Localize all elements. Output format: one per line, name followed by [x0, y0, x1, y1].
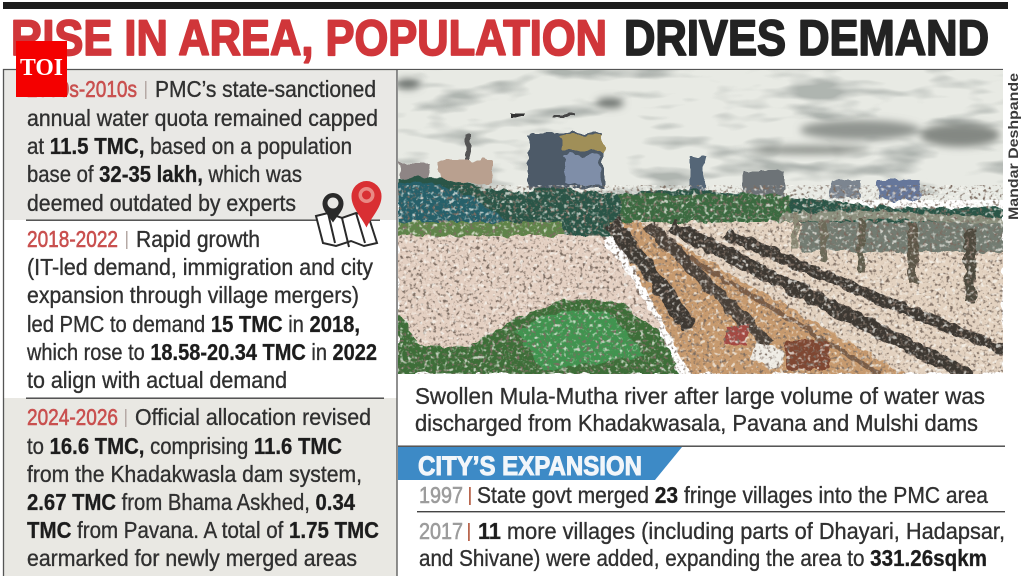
text block: 2000s-2010s	[27, 76, 378, 216]
text block: 2018-2022: (IT-led demand, immigration and city	[27, 254, 373, 280]
text block: 2018-2022: 2018-2022	[27, 226, 118, 252]
text block: 2000s-2010s: annual water quota remained capped	[27, 105, 378, 131]
text block: 2018-2022: Rapid growth	[136, 226, 260, 252]
speckle texture	[398, 185, 1003, 374]
photo credit: Mandar Deshpande	[1006, 72, 1021, 220]
entry: 2017: and Shivane) were added, expanding the area to 331.26sqkm	[419, 545, 987, 571]
section background: 2018-2022	[4, 220, 397, 398]
river right	[640, 222, 1003, 374]
text block: 2024-2026: Official allocation revised	[135, 404, 371, 430]
entry: 1997: State govt merged 23 fringe villages into the PMC area	[477, 482, 988, 508]
text block: 2018-2022	[26, 226, 377, 393]
landscape	[398, 113, 1008, 376]
text block: 2024-2026: from the Khadakwasla dam system,	[27, 461, 362, 487]
entry: 2017	[419, 518, 1005, 571]
TOI badge: TOI	[20, 55, 63, 81]
photo: swollen Mula-Mutha river	[396, 70, 1008, 376]
banner: CITY’S EXPANSION	[418, 451, 642, 481]
entry: 2017: 2017	[419, 518, 463, 544]
text block: 2024-2026: earmarked for newly merged areas	[27, 545, 357, 571]
entry: 1997: 1997	[419, 482, 463, 508]
text block: 2018-2022: which rose to 18.58-20.34 TMC in 2022	[26, 339, 377, 365]
foreground bushes	[398, 299, 680, 374]
entry: 2017: 11 more villages (including parts of Dhayari, Hadapsar,	[478, 518, 1005, 544]
section background: 2024-2026	[4, 398, 397, 576]
text block: 2024-2026	[27, 404, 379, 571]
text block: 2018-2022: led PMC to demand 15 TMC in 2018,	[27, 311, 360, 337]
title: RISE IN AREA, POPULATION	[11, 10, 607, 66]
text block: 2024-2026: TMC from Pavana. A total of 1.75 TMC	[27, 517, 379, 543]
caption: Swollen Mula-Mutha river after large volume of water was	[415, 383, 985, 409]
road and bridge	[610, 222, 905, 374]
text block: 2000s-2010s: base of 32-35 lakh, which was	[27, 161, 302, 187]
text block: 2018-2022: expansion through village mergers)	[27, 282, 359, 308]
cloud texture	[398, 70, 1003, 195]
vehicles	[749, 341, 785, 371]
caption	[415, 383, 985, 436]
text block: 2000s-2010s: deemed outdated by experts	[27, 190, 296, 216]
text block: 2000s-2010s: PMC’s state-sanctioned	[155, 76, 376, 102]
text block: 2000s-2010s: 2000s-2010s	[27, 76, 137, 102]
icon: map with pins	[316, 181, 382, 247]
top black bar	[3, 2, 1008, 9]
skyline buildings	[528, 133, 603, 188]
text block: 2000s-2010s: at 11.5 TMC, based on a population	[27, 133, 352, 159]
text block: 2024-2026: to 16.6 TMC, comprising 11.6 TMC	[27, 433, 342, 459]
flyover	[800, 222, 1003, 252]
caption: discharged from Khadakwasala, Pavana and Mulshi dams	[415, 410, 978, 436]
text block: 2018-2022: to align with actual demand	[27, 367, 287, 393]
section background: 2000s-2010s	[4, 70, 397, 220]
tree line	[398, 177, 1003, 238]
panel: city's expansion	[398, 446, 1005, 571]
clouds	[396, 79, 1000, 154]
river left	[398, 236, 660, 374]
river bank strip	[398, 222, 563, 238]
sky	[398, 70, 1003, 200]
text block: 2024-2026: 2.67 TMC from Bhama Askhed, 0.34	[27, 489, 355, 515]
TOI badge	[16, 41, 67, 97]
text block: 2024-2026: 2024-2026	[27, 404, 118, 430]
